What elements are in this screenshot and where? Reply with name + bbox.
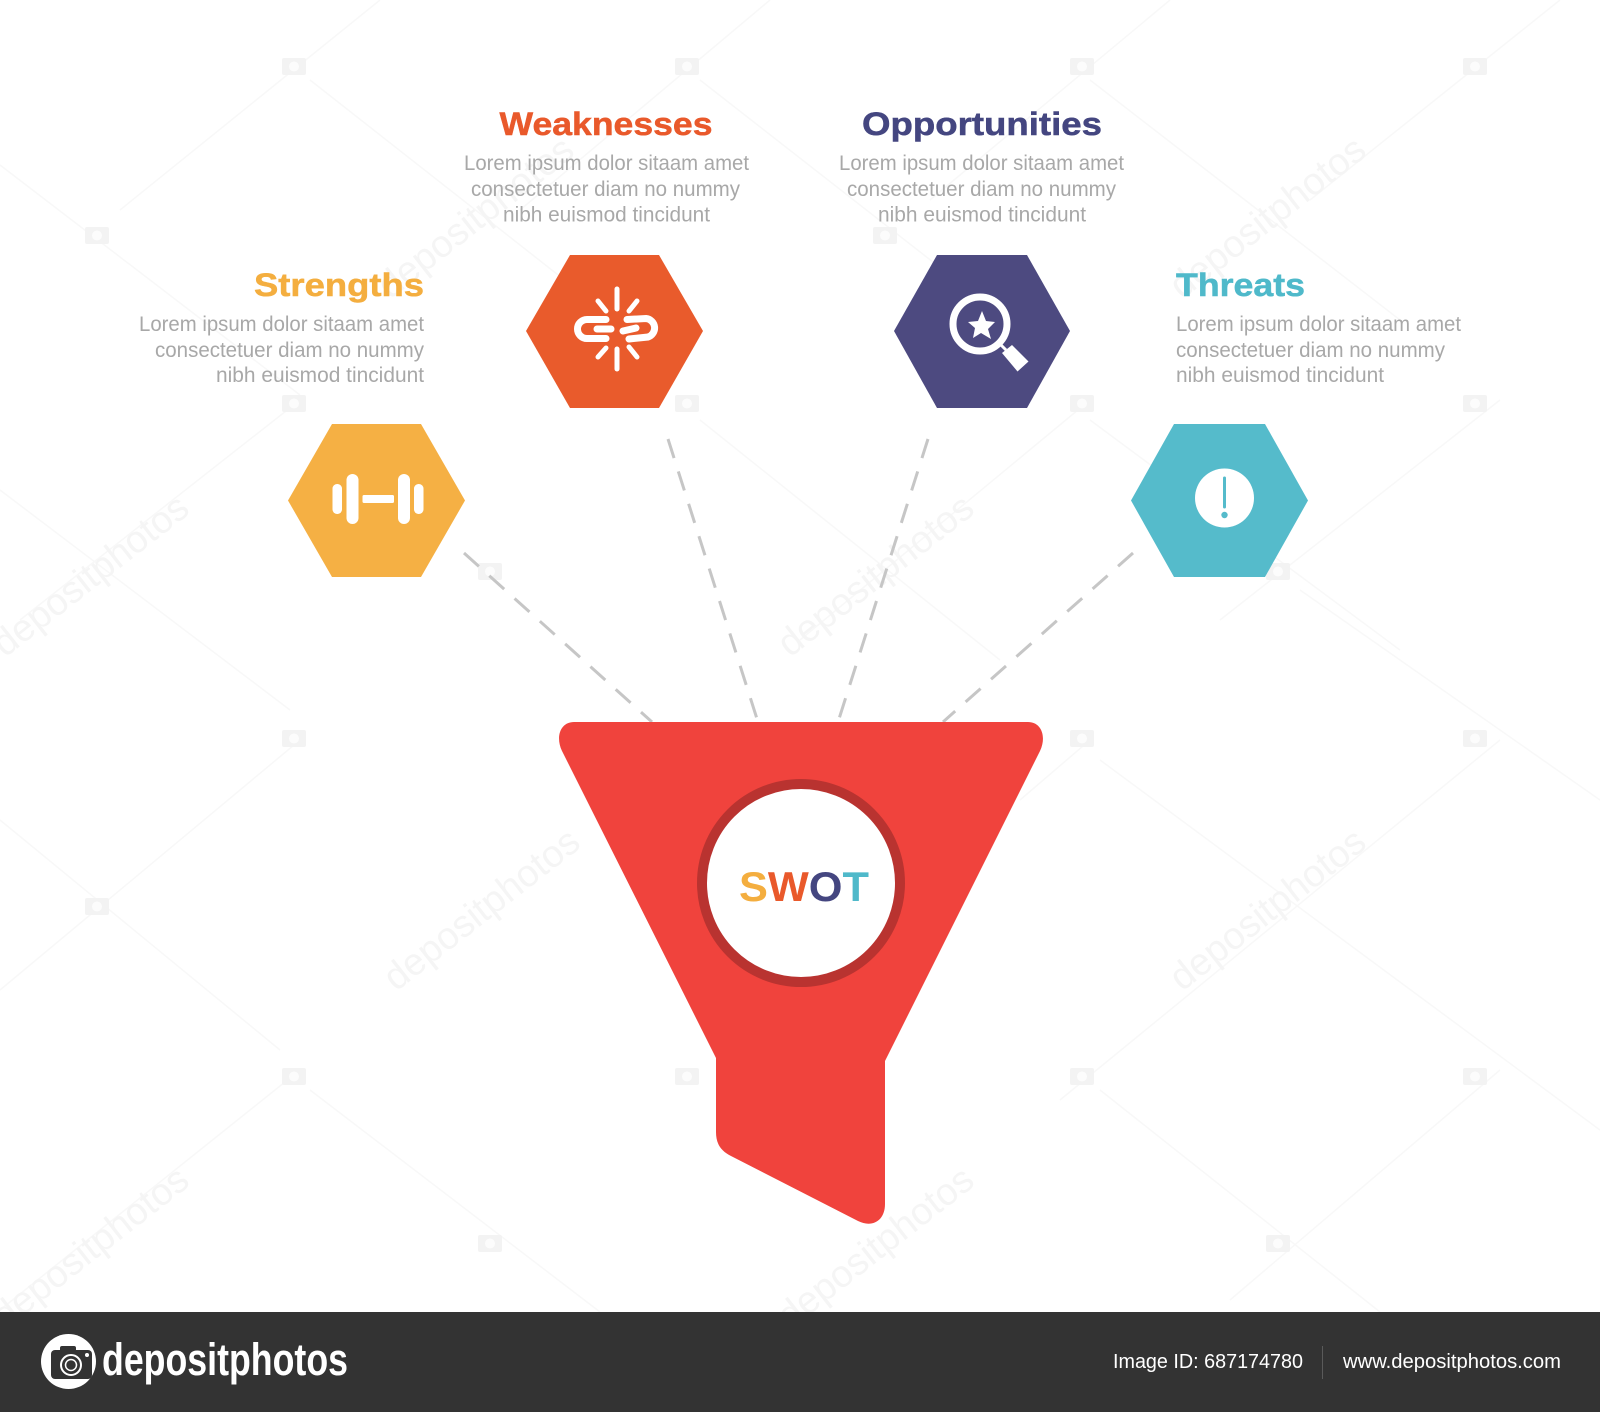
watermark layer: depositphotos <box>370 128 582 307</box>
center badge <box>702 784 900 982</box>
heading: strengths: Strengths <box>254 267 424 303</box>
icon: dumbbell <box>332 474 424 524</box>
heading: weaknesses: Weaknesses <box>500 106 712 142</box>
text block: threats: nibh euismod tincidunt <box>1176 364 1384 387</box>
dashed connectors <box>464 439 1133 722</box>
text block: opportunities: consectetuer diam no nummy <box>847 178 1116 201</box>
text block: opportunities: Lorem ipsum dolor sitaam amet <box>839 152 1124 175</box>
watermark layer: depositphotos <box>1162 820 1374 999</box>
text block: threats: consectetuer diam no nummy <box>1176 339 1445 362</box>
icon: alert <box>1195 468 1254 528</box>
label: SWOT: SWOT <box>739 863 869 910</box>
watermark layer: depositphotos <box>770 486 982 665</box>
logo wordmark: depositphotos <box>102 1334 348 1385</box>
image id: Image ID: 687174780 <box>1113 1351 1303 1373</box>
text block: strengths: consectetuer diam no nummy <box>155 339 424 362</box>
hexagon: opportunities <box>894 255 1070 408</box>
website: www.depositphotos.com <box>1342 1351 1561 1373</box>
panel: weaknesses <box>464 106 749 408</box>
watermark layer: depositphotos <box>770 1158 982 1337</box>
funnel body <box>559 722 1043 1224</box>
watermark layer: depositphotos <box>1162 128 1374 307</box>
footer bar <box>0 1312 1600 1412</box>
text block: opportunities <box>839 152 1124 226</box>
panel: opportunities <box>839 106 1124 408</box>
text block: weaknesses: nibh euismod tincidunt <box>503 204 710 226</box>
text block: threats: Lorem ipsum dolor sitaam amet <box>1176 313 1461 336</box>
icon: magnifier with star <box>953 297 1028 372</box>
text block: strengths: nibh euismod tincidunt <box>216 364 424 387</box>
panel: strengths <box>139 267 465 577</box>
text block: weaknesses: consectetuer diam no nummy <box>471 178 740 201</box>
heading: opportunities: Opportunities <box>862 106 1102 142</box>
hexagon: threats <box>1131 424 1308 577</box>
hexagon: weaknesses <box>526 255 703 408</box>
text block: strengths: Lorem ipsum dolor sitaam amet <box>139 313 424 336</box>
text block: weaknesses <box>464 152 749 226</box>
text block: threats <box>1176 313 1461 387</box>
text block: opportunities: nibh euismod tincidunt <box>878 204 1086 226</box>
panel: threats <box>1131 267 1461 577</box>
icon: camera logo <box>41 1334 96 1389</box>
text block: weaknesses: Lorem ipsum dolor sitaam amet <box>464 152 749 175</box>
icon: broken chain <box>578 289 655 369</box>
hexagon: strengths <box>288 424 465 577</box>
funnel <box>559 722 1043 1224</box>
watermark layer: depositphotos <box>376 820 588 999</box>
heading: threats: Threats <box>1176 267 1305 303</box>
text block: strengths <box>139 313 424 387</box>
